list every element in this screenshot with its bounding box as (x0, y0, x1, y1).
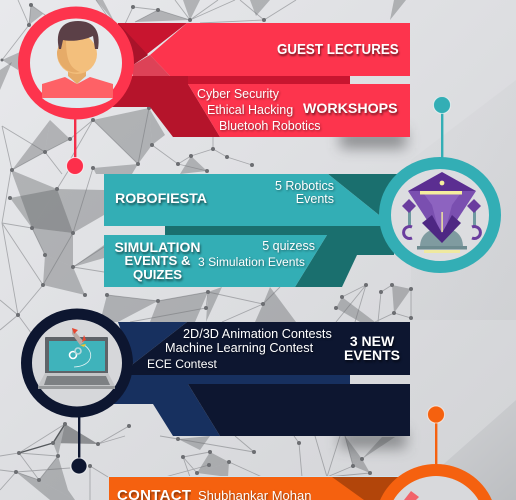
heading: simulation events and quizes: EVENTS & (125, 253, 190, 268)
icon: person in red ring (18, 6, 134, 120)
panel: guest lectures and workshops (red) (18, 6, 410, 175)
heading: simulation events and quizes: QUIZES (133, 267, 182, 282)
icon: laptop in navy ring (21, 308, 133, 418)
pin: red connector (66, 119, 84, 175)
panel: contact (orange) (109, 406, 492, 500)
teal ribbon bars (104, 174, 397, 287)
heading: simulation events and quizes (114, 239, 202, 285)
text: workshop topics: Bluetooh Robotics (219, 119, 320, 133)
heading: 3 new events (344, 333, 400, 363)
text: workshop topics: Cyber Security (197, 87, 279, 101)
text: quizzes and simulation events: 3 Simulation Events (198, 255, 305, 269)
text: new contests: ECE Contest (147, 357, 217, 371)
pin: navy connector (70, 417, 88, 474)
orange ribbon bar (109, 476, 399, 500)
heading: robofiesta: ROBOFIESTA (115, 191, 207, 207)
text: new contests (147, 327, 332, 371)
pin: orange connector (427, 406, 445, 464)
navy ribbon bars (114, 322, 410, 436)
icon: orange ring (380, 464, 492, 500)
text: quizzes and simulation events (198, 239, 316, 269)
heading: guest lectures: GUEST LECTURES (277, 41, 399, 58)
text: workshop topics: Ethical Hacking (207, 103, 293, 117)
heading: simulation events and quizes: SIMULATION (114, 239, 201, 255)
pin: teal connector (433, 97, 451, 158)
icon: robot in teal ring (379, 157, 501, 273)
text: new contests: 2D/3D Animation Contests (183, 327, 332, 341)
text: new contests: Machine Learning Contest (165, 341, 313, 355)
panel: robofiesta and simulation (teal) (104, 97, 501, 287)
text: workshop topics (197, 87, 322, 133)
text: quizzes and simulation events: 5 quizess (262, 239, 315, 253)
heading: workshops: WORKSHOPS (303, 101, 398, 117)
panel: new events (navy) (21, 308, 410, 474)
text: robotics events: 5 Robotics Events (275, 179, 334, 206)
red ribbon bars (112, 23, 410, 137)
heading: 3 new events: 3 NEW (350, 333, 394, 349)
heading: 3 new events: EVENTS (344, 347, 400, 363)
